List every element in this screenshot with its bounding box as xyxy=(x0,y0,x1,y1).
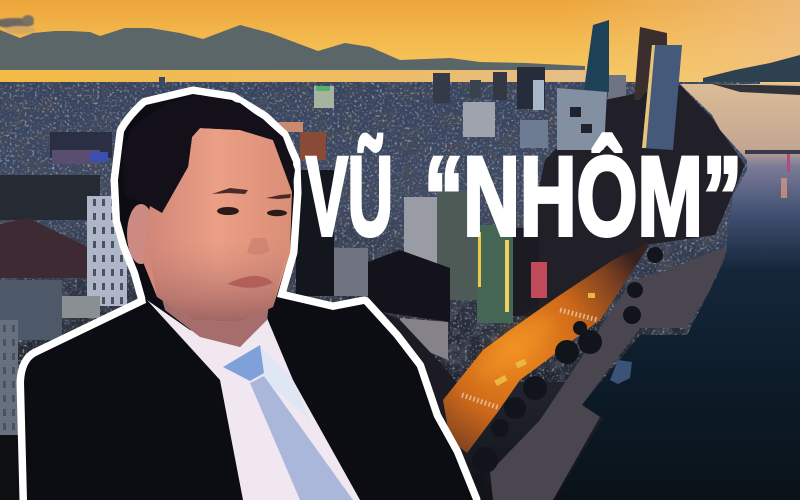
tower: twin building front xyxy=(642,45,682,150)
left district buildings xyxy=(0,132,127,500)
face xyxy=(143,128,292,322)
eyes xyxy=(217,207,287,216)
person cutout xyxy=(24,94,473,500)
cars xyxy=(494,293,595,386)
lips xyxy=(227,276,273,288)
necktie xyxy=(223,345,353,500)
tie body xyxy=(250,376,353,500)
hair xyxy=(122,95,295,213)
dark riverfront block xyxy=(515,85,745,325)
title xyxy=(306,134,742,259)
downtown buildings xyxy=(159,67,626,160)
mountain range xyxy=(0,25,585,72)
shirt collar shade xyxy=(223,345,310,420)
tower: twin building rear xyxy=(634,27,667,100)
tie knot xyxy=(223,345,264,381)
river xyxy=(555,84,800,500)
eyebrows xyxy=(212,188,291,199)
shoreline strip xyxy=(712,84,800,95)
midrise buildings behind title xyxy=(296,170,547,420)
riverside promenade and pier xyxy=(490,250,727,500)
orange lit avenue xyxy=(443,243,648,453)
ear xyxy=(127,204,155,264)
crosswalks xyxy=(462,310,598,408)
tower: sail-shaped skyscraper xyxy=(584,20,609,92)
neck and chin xyxy=(157,280,272,347)
tower: wide block xyxy=(557,88,607,150)
landmark towers xyxy=(557,20,682,150)
street trees xyxy=(467,247,663,491)
white sticker outline with suit jacket xyxy=(24,94,473,500)
background: sunset sky xyxy=(0,0,800,85)
city texture xyxy=(0,82,760,382)
cloud at left horizon xyxy=(0,15,36,34)
distant headland xyxy=(703,55,800,82)
bay water xyxy=(0,70,590,85)
jaw shading xyxy=(146,240,290,322)
white shirt xyxy=(147,300,360,500)
title word: VŨ: VŨ xyxy=(306,134,393,259)
nose xyxy=(247,238,270,255)
bridge xyxy=(745,150,800,198)
city base xyxy=(0,82,760,500)
boat xyxy=(610,360,632,384)
street glow xyxy=(469,307,561,389)
